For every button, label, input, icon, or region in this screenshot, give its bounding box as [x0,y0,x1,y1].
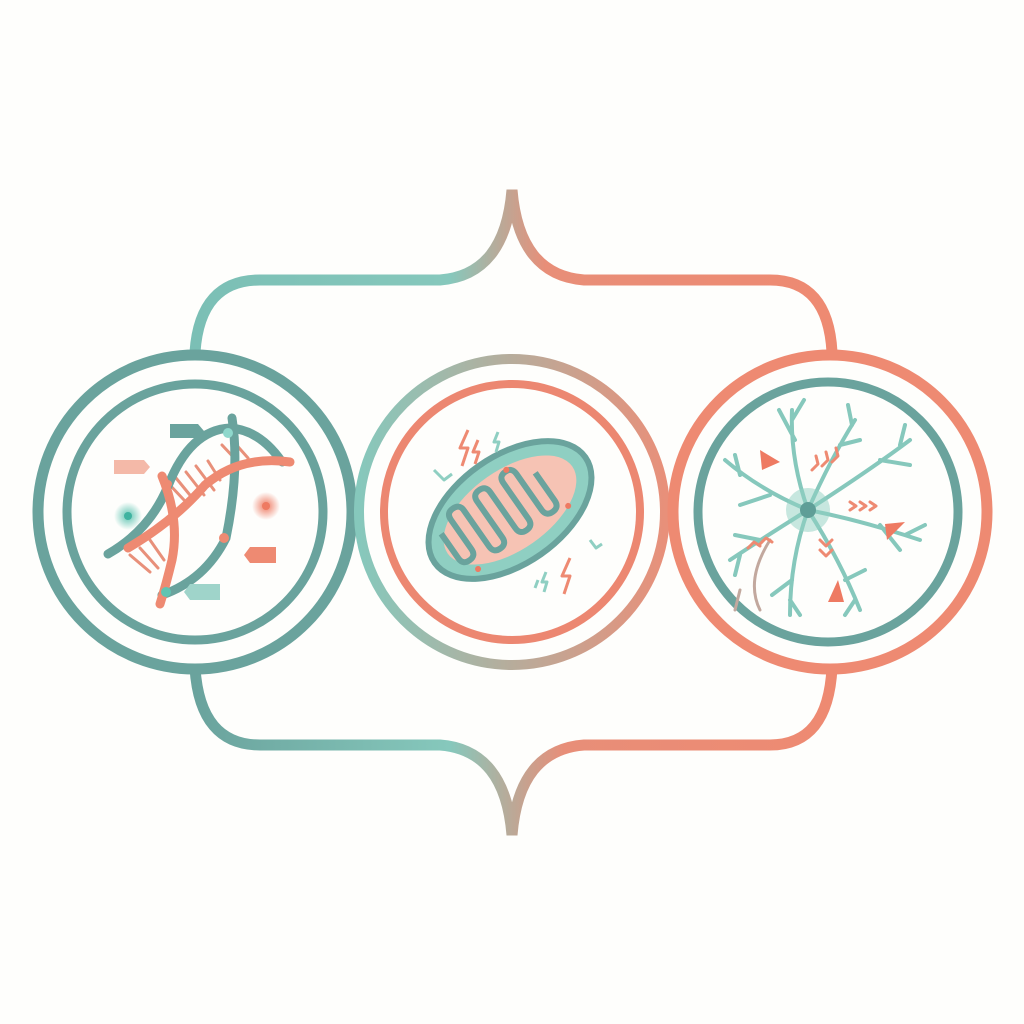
icon: arrows [760,450,905,602]
icon: lightning bolts [434,430,602,594]
panel: DNA circle [38,355,352,669]
icon: DNA helix [108,418,290,604]
frame: top ornament [195,190,832,352]
frame: bottom ornament [195,668,832,835]
icon: glow dots [114,428,280,597]
icon: neuron [725,400,925,615]
icon: mitochondrion [404,413,616,607]
panel: mitochondrion circle [359,359,665,665]
icon: tags [114,424,276,600]
panel: neuron circle [673,355,987,669]
